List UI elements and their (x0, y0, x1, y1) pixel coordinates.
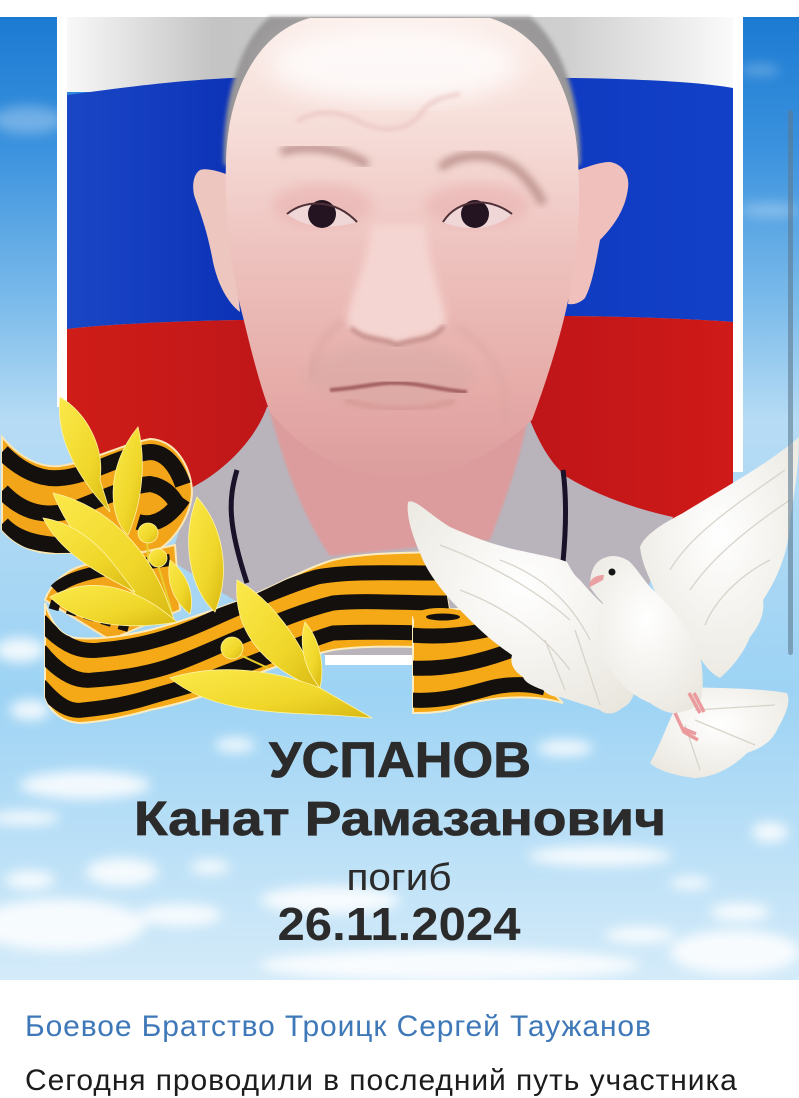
ribbon of Saint George (2, 437, 563, 723)
shirt (170, 407, 673, 655)
left ear (193, 169, 240, 312)
page scrollbar (788, 110, 793, 655)
head and face (226, 18, 579, 480)
feet (675, 693, 704, 740)
left eye (287, 204, 357, 227)
nose (347, 225, 446, 344)
name: given name: Канат Рамазанович (134, 793, 666, 846)
body (590, 556, 703, 713)
name: surname: УСПАНОВ (269, 732, 531, 788)
post author: Боевое Братство Троицк Сергей Таужанов (25, 1010, 652, 1043)
main band (45, 552, 455, 723)
right tail (413, 609, 563, 713)
nasolabial folds (312, 320, 343, 378)
berry stems (147, 540, 268, 668)
portrait (170, 17, 673, 655)
forehead wrinkle (297, 94, 460, 129)
label: died: погиб (346, 857, 452, 899)
right eye (443, 204, 512, 228)
forehead highlight (270, 27, 520, 103)
date of death: 26.11.2024 (278, 898, 521, 950)
flag panel (57, 17, 743, 665)
right ear (568, 162, 628, 304)
ribbon loop ring (413, 608, 467, 626)
beak (590, 575, 604, 587)
hair stubble (224, 17, 580, 165)
brows (281, 148, 368, 165)
white dove (408, 437, 799, 778)
neck (268, 405, 528, 556)
golden laurel branches (43, 397, 372, 718)
eye (608, 568, 616, 576)
left wing (408, 501, 636, 714)
upper left loop (2, 437, 192, 553)
mouth (330, 383, 467, 392)
right wing (640, 437, 799, 678)
lower face shading (305, 343, 475, 407)
rear fold of main band (45, 545, 180, 640)
eye sockets (272, 183, 372, 227)
post text: Сегодня проводили в последний путь участника (25, 1064, 738, 1097)
tail (650, 687, 788, 778)
lanyard (231, 470, 247, 583)
